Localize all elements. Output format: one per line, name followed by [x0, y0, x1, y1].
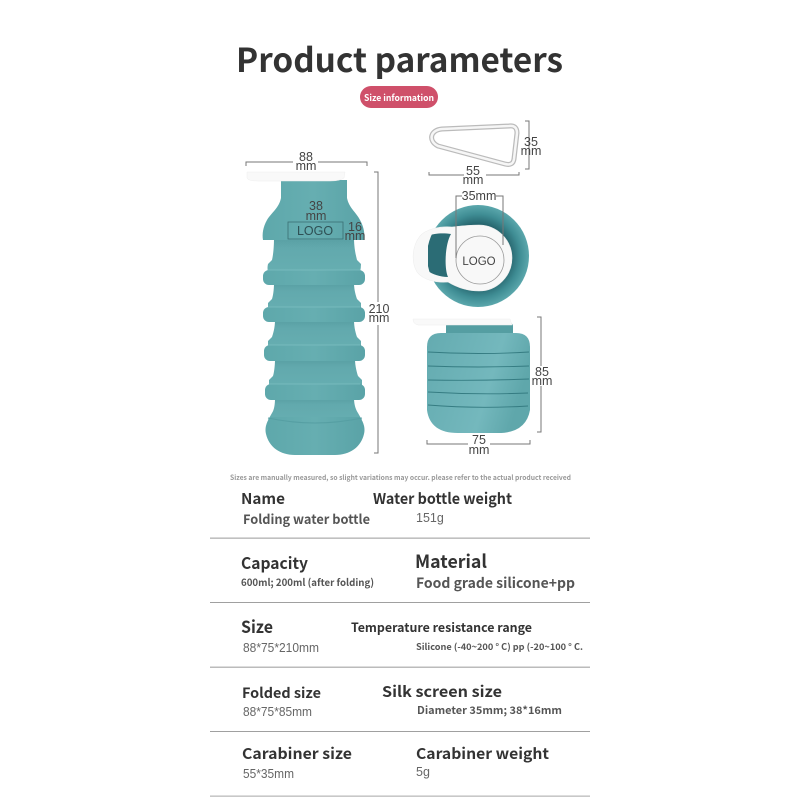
row: capacity and material: 600ml; 200ml (after folding) — [241, 574, 374, 589]
row: name and water bottle weight: Name — [241, 488, 285, 509]
row: size and temperature range: Temperature resistance range — [351, 617, 532, 636]
dimension: folded width 75 mm — [427, 433, 530, 457]
dimension: bottle height 210 mm: 210 — [369, 302, 389, 316]
row: size and temperature range — [241, 613, 583, 655]
dimension: carabiner width: 55 — [466, 164, 480, 178]
dimension: carabiner width — [429, 164, 519, 187]
logo print area: 16 — [348, 220, 362, 234]
logo print area: mm — [306, 209, 326, 223]
dimension: folded height 85 mm — [532, 317, 552, 432]
row: size and temperature range: Size — [241, 613, 273, 638]
badge: size information — [360, 86, 438, 108]
dimension: folded height 85 mm: mm — [532, 374, 552, 388]
icon: bottle top circle — [427, 205, 529, 307]
disclaimer note: Sizes are manually measured, so slight variations may occur. please refer to the actual product received — [230, 473, 571, 483]
icon: carabiner — [432, 126, 517, 164]
row: name and water bottle weight: 151g — [416, 511, 444, 525]
row: size and temperature range: 88*75*210mm — [243, 641, 319, 655]
row: size and temperature range: Silicone (-40~200 ° C) pp (-20~100 ° C. — [416, 640, 583, 653]
dimension: carabiner height: mm — [521, 144, 541, 158]
row: name and water bottle weight: Folding water bottle — [243, 509, 370, 528]
row: capacity and material: Food grade silicone+pp — [416, 573, 575, 593]
icon: white lid with loop — [413, 225, 512, 291]
row: capacity and material: Material — [415, 548, 487, 574]
dimension: carabiner width: mm — [463, 173, 483, 187]
icon: folded bottle — [413, 319, 530, 433]
row: capacity and material: Capacity — [241, 550, 308, 574]
logo print area — [288, 199, 365, 243]
dimension: bottle width 88 mm: 88 — [299, 150, 313, 164]
dimension: carabiner height: 35 — [524, 135, 538, 149]
row: carabiner size and weight: 5g — [416, 765, 430, 779]
logo print area: LOGO — [297, 224, 333, 238]
row: carabiner size and weight: 55*35mm — [243, 767, 294, 781]
badge: size information: Size information — [364, 91, 434, 104]
carabiner with dimensions — [429, 121, 541, 187]
dimension: folded height 85 mm: 85 — [535, 365, 549, 379]
dimension: carabiner height — [521, 121, 541, 169]
bottle with dimensions — [246, 150, 389, 455]
folded bottle with dimensions — [413, 317, 552, 457]
dimension: bottle width 88 mm: mm — [296, 159, 316, 173]
row: folded size and silk screen size — [242, 681, 562, 719]
title: Product parameters — [236, 34, 563, 82]
dimension: logo diameter 35mm: 35mm — [462, 189, 496, 203]
icon: unfolded bottle — [247, 172, 365, 455]
logo print area: mm — [345, 229, 365, 243]
dimension: folded width 75 mm: 75 — [472, 433, 486, 447]
row: capacity and material — [241, 548, 575, 593]
dimension: bottle height 210 mm — [369, 172, 389, 453]
top view of bottle — [413, 189, 529, 307]
logo circle: LOGO — [462, 256, 496, 268]
row: folded size and silk screen size: Diameter 35mm; 38*16mm — [417, 703, 562, 718]
row: folded size and silk screen size: Folded size — [242, 683, 321, 703]
row: carabiner size and weight — [242, 743, 550, 781]
dimension: folded width 75 mm: mm — [469, 443, 489, 457]
row: name and water bottle weight — [241, 488, 513, 528]
row: folded size and silk screen size: Silk screen size — [382, 681, 502, 702]
row: carabiner size and weight: Carabiner size — [242, 743, 352, 764]
logo print area: 38 — [309, 199, 323, 213]
dimension: bottle width 88 mm — [246, 150, 367, 173]
row: folded size and silk screen size: 88*75*85mm — [243, 705, 312, 719]
row: name and water bottle weight: Water bottle weight — [373, 488, 513, 509]
dimension: bottle height 210 mm: mm — [369, 311, 389, 325]
row: carabiner size and weight: Carabiner weight — [416, 743, 550, 764]
